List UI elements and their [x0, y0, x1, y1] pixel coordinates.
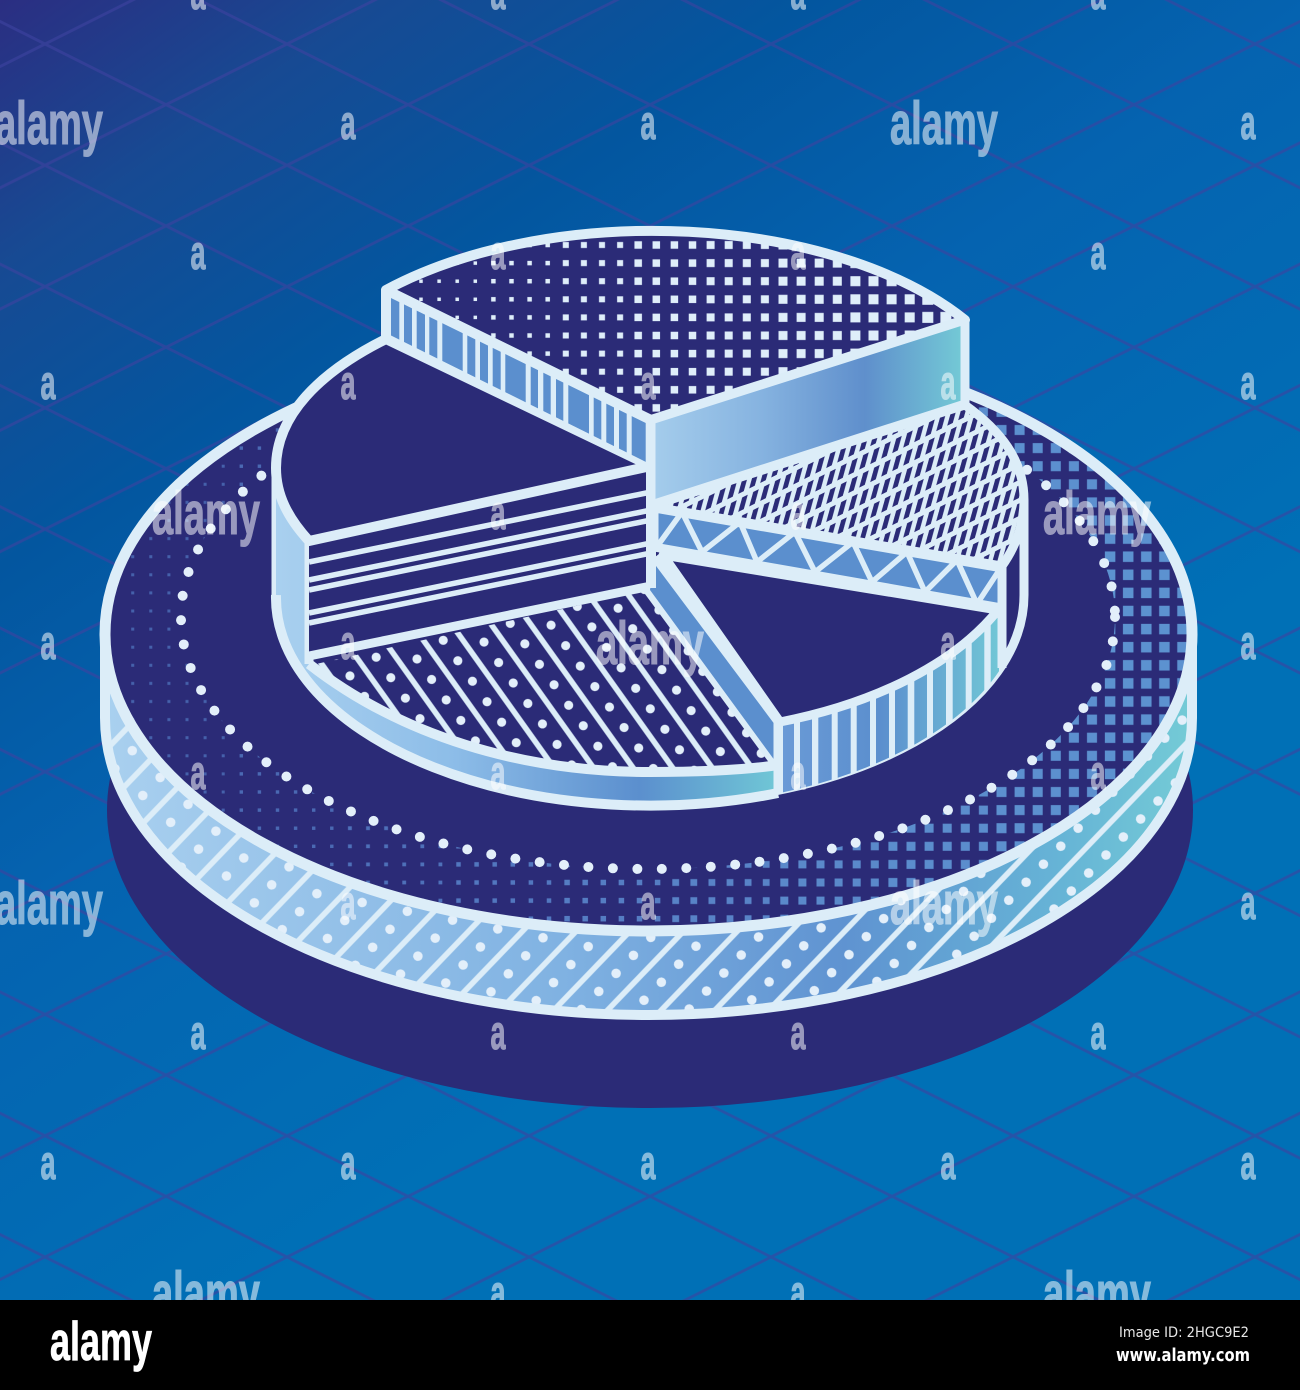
- watermarks: a: [790, 227, 806, 280]
- watermarks: alamy: [152, 1260, 260, 1327]
- watermarks: a: [940, 1137, 956, 1190]
- watermarks: a: [640, 877, 656, 930]
- watermarks: a: [640, 1137, 656, 1190]
- watermarks: a: [790, 1267, 806, 1320]
- watermarks: alamy: [0, 90, 103, 157]
- watermarks: a: [1090, 227, 1106, 280]
- watermarks: alamy: [1043, 1260, 1151, 1327]
- base disc: top face with halftone ring: [100, 388, 1198, 936]
- watermarks: a: [1090, 747, 1106, 800]
- watermarks: alamy: [890, 90, 998, 157]
- watermarks: a: [1240, 617, 1256, 670]
- watermarks: a: [340, 1137, 356, 1190]
- watermarks: a: [1240, 1137, 1256, 1190]
- watermarks: alamy: [152, 480, 260, 547]
- slice: crosshatched top with triangle band: [654, 405, 1024, 608]
- slice: dark upper-left slice: [276, 339, 651, 541]
- watermarks: a: [940, 617, 956, 670]
- watermarks: a: [640, 357, 656, 410]
- watermarks: a: [40, 357, 56, 410]
- watermarks: alamy: [1043, 480, 1151, 547]
- base disc: side wall: [105, 634, 1192, 1015]
- watermarks: a: [490, 747, 506, 800]
- watermarks: alamy: [596, 610, 704, 677]
- pie: outer body: [276, 470, 1024, 803]
- website: www.alamy.com: [1116, 1345, 1250, 1366]
- drop shadow of the base: [107, 512, 1193, 1108]
- watermarks: a: [790, 747, 806, 800]
- dotted ring on the base: [181, 365, 1115, 869]
- footer logo: alamy: [50, 1310, 152, 1372]
- watermarks: a: [190, 227, 206, 280]
- watermarks: a: [190, 747, 206, 800]
- watermarks: a: [340, 877, 356, 930]
- watermarks: a: [1090, 1007, 1106, 1060]
- slice: raised halftone slice: [386, 225, 991, 588]
- watermarks: a: [490, 487, 506, 540]
- watermarks: alamy: [890, 870, 998, 937]
- watermarks: a: [790, 1007, 806, 1060]
- watermarks: a: [490, 1007, 506, 1060]
- slice: bottom-right dark slice with bar wall: [650, 555, 1003, 810]
- watermarks: a: [190, 1007, 206, 1060]
- watermarks: a: [40, 1137, 56, 1190]
- slice: low dotted-stripe slice: [276, 470, 778, 806]
- watermarks: a: [490, 1267, 506, 1320]
- watermarks: a: [640, 97, 656, 150]
- watermarks: a: [790, 487, 806, 540]
- watermarks: a: [340, 357, 356, 410]
- watermarks: a: [940, 357, 956, 410]
- watermarks: a: [40, 617, 56, 670]
- watermarks: a: [1240, 97, 1256, 150]
- footer bar: [0, 1300, 1300, 1390]
- image id: Image ID: 2HGC9E2: [1119, 1325, 1249, 1341]
- watermarks: a: [340, 617, 356, 670]
- slice: stripes wall: [309, 466, 651, 656]
- watermarks: a: [1240, 357, 1256, 410]
- watermarks: a: [490, 227, 506, 280]
- watermarks: a: [1240, 877, 1256, 930]
- watermarks: a: [340, 97, 356, 150]
- watermarks: alamy: [0, 870, 103, 937]
